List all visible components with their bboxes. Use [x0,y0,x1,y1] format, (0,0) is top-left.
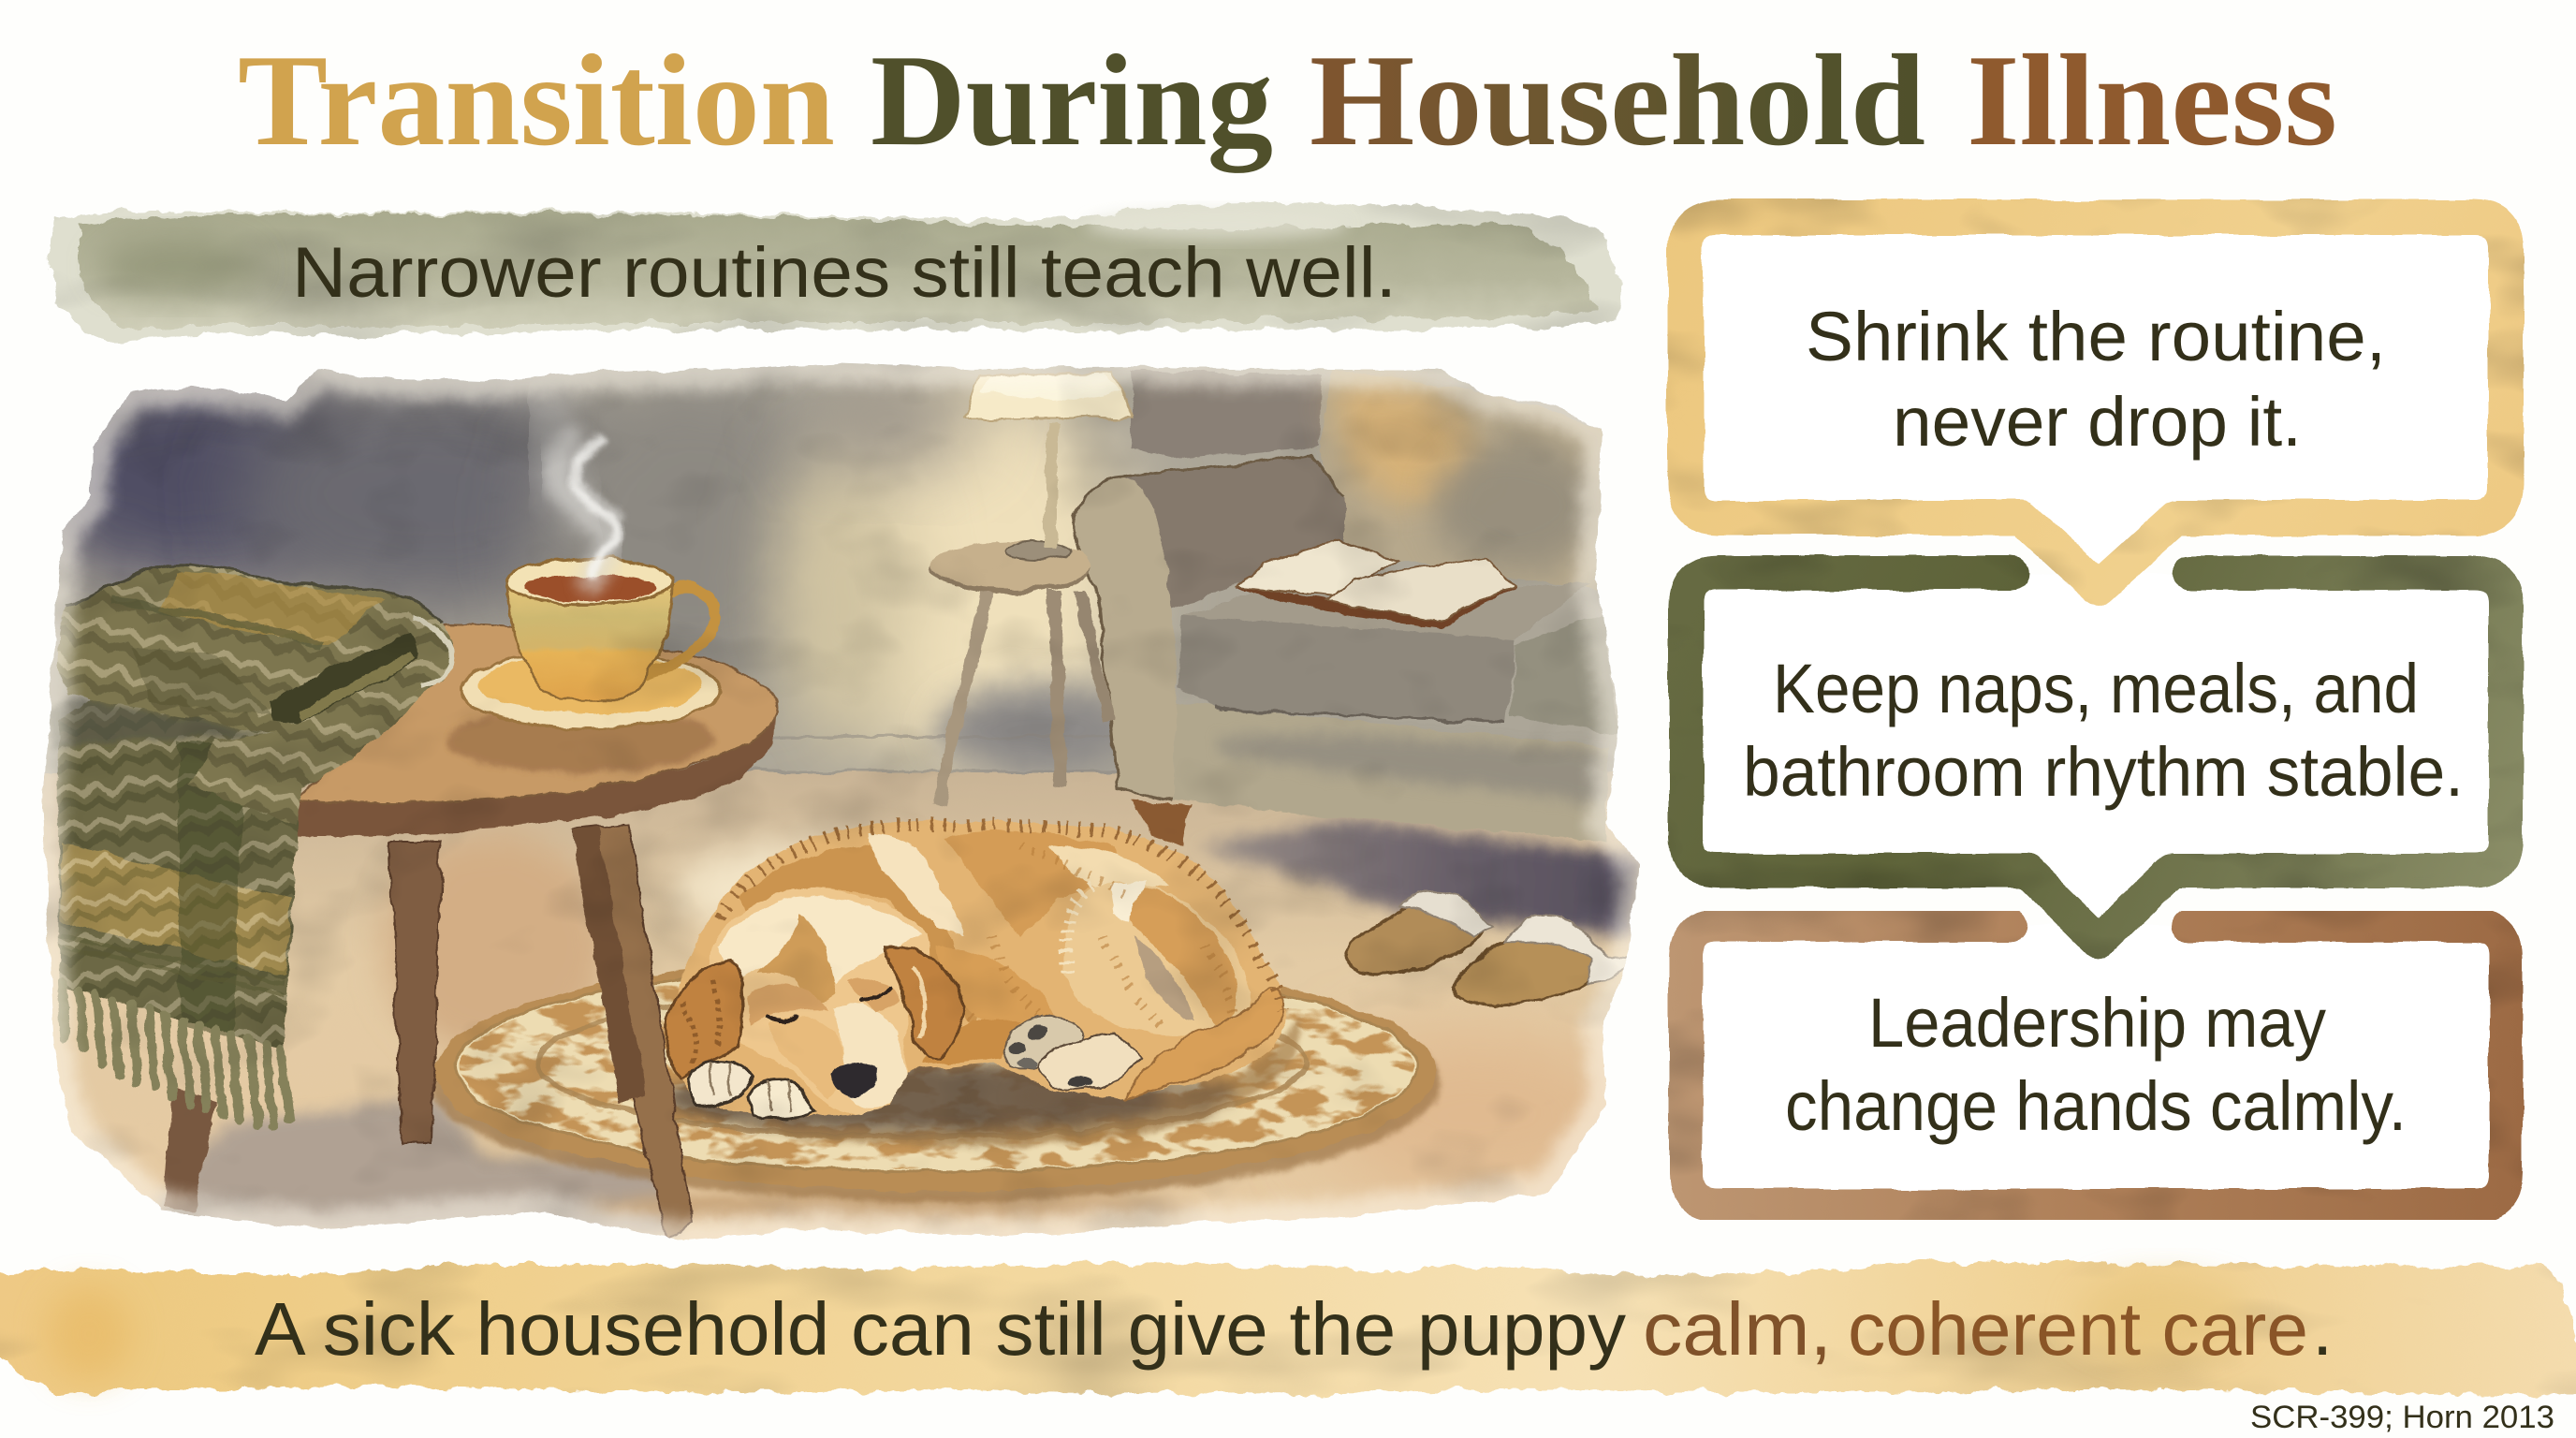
illustration: puppy sleeping in a quiet living room [19,346,1657,1250]
footer text [255,1287,2333,1371]
nose [831,1063,877,1097]
paws: hind pad and lower paw [1004,1016,1142,1091]
callout text: Leadership may [1868,984,2326,1062]
banner: narrower routines [51,202,1622,341]
side table and lamp [931,373,1132,805]
callout text: never drop it. [1893,383,2302,461]
tail [1124,988,1283,1098]
folded blanket roll [57,565,451,733]
fringe [62,983,288,1128]
title: Household [1310,28,1925,173]
callout text [1806,298,2386,461]
callout text: change hands calmly. [1785,1067,2407,1145]
fur patches [739,831,1170,1065]
title: During [871,28,1273,173]
source note: SCR-399; Horn 2013 [2250,1400,2554,1435]
slippers [1344,892,1632,1005]
saucer [461,652,720,728]
hind leg [1062,880,1250,1035]
footer text: coherent care [1848,1287,2308,1371]
title: Illness [1967,28,2337,173]
callout: leadership [1686,925,2506,1206]
callout text: bathroom rhythm stable. [1743,733,2464,811]
open book [1237,541,1515,627]
scene edge fade [43,363,1638,1240]
hanging blanket [47,697,300,1050]
ears [666,946,964,1077]
front legs [389,842,441,1143]
round table with cup [161,559,777,1239]
puppy body [670,821,1285,1119]
cup [505,581,672,700]
callout text: Shrink the routine, [1806,298,2386,375]
roll inner fold [269,634,420,724]
steam [545,403,622,580]
blanket sash over table [187,676,442,824]
table top surface [296,624,777,802]
puppy [666,821,1285,1119]
callouts [1686,217,2506,1206]
footer banner [0,1260,2576,1395]
blanket [47,565,451,1128]
table top edge [293,712,776,836]
title [238,28,2337,173]
fur top edge [721,825,1282,1011]
armchair [1073,370,1617,847]
rug [431,953,1442,1202]
wall wash [19,346,1657,786]
callout text [1743,650,2464,811]
fur streaks [917,847,1236,1030]
footer text: A sick household can still give the puppy [255,1287,1626,1371]
footer text: calm, [1643,1287,1832,1371]
floor wash [28,772,1657,1250]
footer text: . [2312,1287,2333,1371]
title: Transition [238,28,835,173]
tea [525,575,656,601]
callout text: Keep naps, meals, and [1773,650,2419,727]
callout: shrink the routine [1686,217,2506,588]
back leg [161,1086,217,1211]
callout: keep naps, meals [1686,573,2506,942]
head [709,889,929,1112]
callout text [1785,984,2407,1145]
banner text: Narrower routines still teach well. [292,233,1397,313]
closed eyes [768,989,887,1022]
front paws [689,1062,816,1119]
cup handle [648,588,716,674]
